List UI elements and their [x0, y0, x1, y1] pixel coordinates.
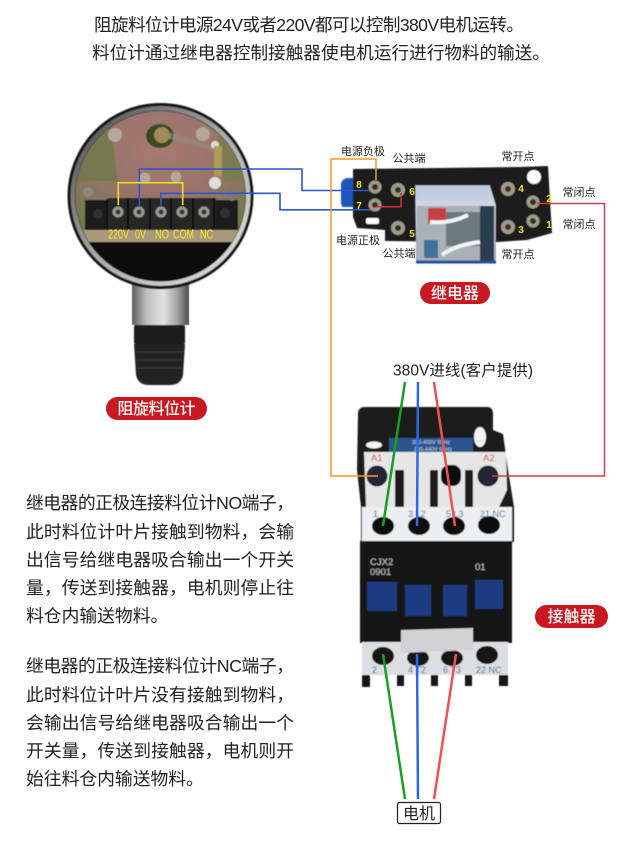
contactor: 380-440V 60Hz	[414, 447, 452, 453]
terminal numbers: 3	[518, 225, 524, 236]
text block: NO terminal explanation: 继电器的正极连接料位计NO端子，	[26, 493, 294, 513]
terminal numbers: 6	[409, 187, 415, 198]
wire: red relay jumper	[375, 193, 401, 207]
text block: NC terminal explanation: 会输出信号给继电器吸合输出一个	[26, 713, 294, 733]
middle housing with blue windows	[360, 541, 512, 643]
text block: NO terminal explanation: 出信号给继电器吸合输出一个开关	[26, 550, 294, 570]
relay terminal labels: 常闭点	[562, 186, 596, 199]
title	[92, 15, 550, 63]
terminal labels: NC	[200, 228, 213, 242]
label: relay	[420, 282, 490, 304]
relay	[336, 144, 596, 263]
contactor: 21 NC	[480, 509, 506, 519]
contactor: 22 NC	[476, 665, 502, 675]
label: contactor	[535, 605, 608, 628]
relay terminal labels	[336, 144, 596, 261]
relay cube	[415, 185, 496, 263]
wire: red relay to A2	[492, 204, 604, 476]
terminal labels: COM	[173, 228, 194, 242]
text block: NC terminal explanation: 开关量，传送到接触器，电机则开	[26, 741, 294, 761]
relay terminal labels: 常闭点	[562, 218, 596, 231]
wires: contactor to motor	[383, 654, 456, 799]
contactor: 3 L2	[408, 509, 426, 519]
cable gland and neck	[132, 280, 189, 385]
text block: NC terminal explanation: 始往料仓内输送物料。	[26, 769, 204, 789]
text block: NC terminal explanation: 此时料位计叶片没有接触到物料，	[26, 685, 294, 705]
contactor: 4 T2	[408, 665, 426, 675]
sensor: rotary paddle level switch	[68, 103, 254, 385]
terminal labels: 0V	[135, 228, 146, 242]
label: relay: 继电器	[431, 284, 479, 302]
contactor: 0901	[370, 567, 391, 578]
wire: orange relay to A1	[331, 159, 378, 476]
contactor: 2	[372, 665, 377, 675]
screws and pivot	[83, 127, 237, 201]
terminal numbers: 5	[409, 229, 415, 240]
contactor: 6 T3	[443, 665, 461, 675]
lower terminal strip	[362, 642, 508, 675]
contactor: A2	[483, 453, 495, 464]
label box: motor	[398, 802, 440, 824]
text block: NO terminal explanation: 料仓内输送物料。	[26, 606, 168, 626]
relay terminal labels: 公共端	[382, 247, 416, 260]
terminal numbers: 4	[518, 184, 524, 195]
terminal block	[85, 200, 238, 230]
terminal numbers: 7	[356, 201, 362, 212]
wires: level switch to relay (blue)	[139, 169, 370, 210]
contactor: 01	[475, 562, 486, 573]
terminal labels	[108, 228, 213, 242]
spring	[170, 136, 214, 148]
contactor: 380-400V 50Hz	[412, 440, 450, 446]
contactor: 5 L3	[446, 509, 464, 519]
contactor: A1	[371, 453, 383, 464]
grey center cover	[401, 628, 473, 653]
relay base	[341, 166, 552, 242]
contactor: 1	[373, 509, 378, 519]
terminal numbers: 1	[546, 220, 552, 231]
text block: NO terminal explanation: 此时料位计叶片接触到物料，会输	[26, 522, 294, 542]
label box: motor: 电机	[403, 805, 435, 823]
label: contactor: 接触器	[547, 608, 596, 626]
terminal numbers	[356, 180, 552, 240]
relay terminal labels: 公共端	[392, 152, 426, 165]
text block: NC terminal explanation: 继电器的正极连接料位计NC端子，	[26, 656, 294, 676]
label: level switch: 阻旋料位计	[118, 399, 196, 418]
text block: NO terminal explanation	[26, 493, 294, 626]
terminal numbers: 8	[356, 180, 362, 191]
wires: 380V supply to contactor	[383, 382, 455, 526]
coil terminal section	[364, 452, 507, 507]
terminal labels: NO	[155, 228, 169, 242]
upper terminal strip	[362, 507, 512, 541]
round housing	[68, 103, 254, 292]
text block: NC terminal explanation	[26, 656, 294, 789]
title: 料位计通过继电器控制接触器使电机运行进行物料的输送。	[92, 43, 550, 63]
upper housing	[357, 407, 514, 542]
relay terminal labels: 常开点	[502, 150, 534, 163]
contactor	[357, 407, 514, 687]
relay terminal labels: 电源负极	[341, 144, 385, 158]
terminal labels: 220V	[108, 228, 129, 242]
title: 阻旋料位计电源24V或者220V都可以控制380V电机运转。	[94, 15, 524, 35]
contactor: CJX2	[370, 557, 393, 568]
terminal numbers: 2	[546, 194, 552, 205]
label: level switch	[106, 397, 207, 420]
label: 380V supply: 380V进线(客户提供)	[393, 362, 533, 380]
text block: NO terminal explanation: 量，传送到接触器，电机则停止往	[26, 578, 294, 598]
feet	[362, 675, 508, 687]
relay terminal labels: 电源正极	[336, 233, 380, 247]
wire: yellow jumper	[118, 183, 183, 205]
relay terminal labels: 常开点	[502, 248, 534, 261]
